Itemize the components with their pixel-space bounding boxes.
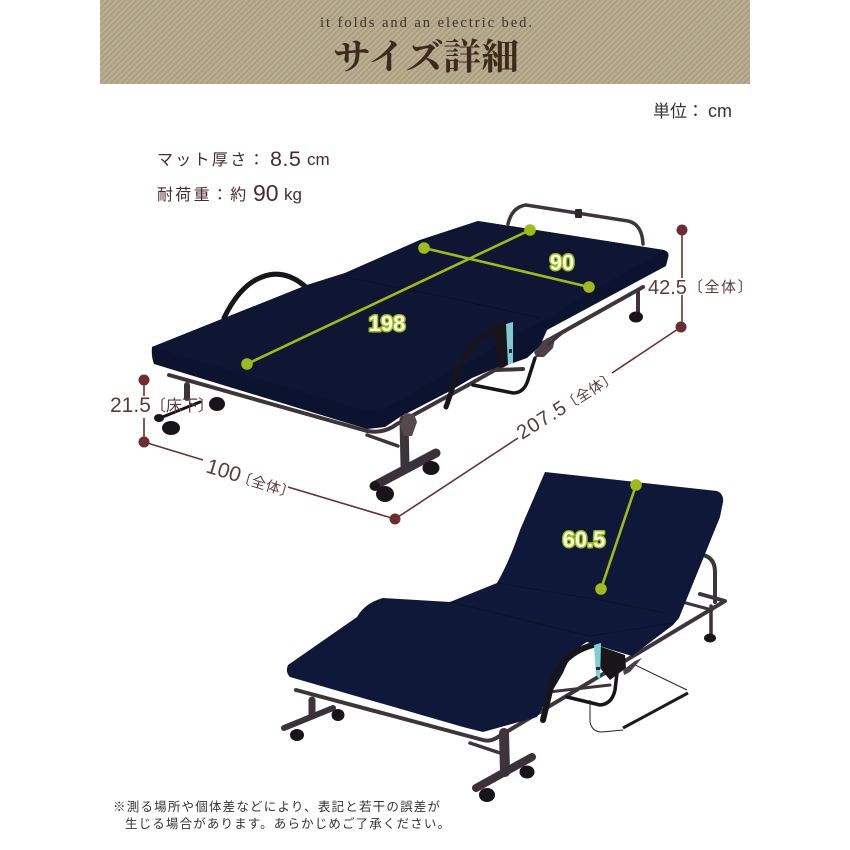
dimension: floor clearance 21.5 (110, 374, 214, 448)
mattress thickness: マット厚さ： (157, 151, 267, 169)
dimension: height 42.5: 〔全体〕 (688, 279, 754, 296)
reclined bed photo (284, 472, 725, 802)
cord (590, 665, 687, 732)
head handle (703, 555, 715, 602)
arch handle (543, 645, 593, 720)
dimension: back height 60.5 (563, 479, 642, 595)
fold bracket (473, 358, 535, 393)
dimension: length 198 (241, 224, 536, 370)
dimension: width 100 (144, 442, 400, 524)
dimension: length 198: 198 (369, 311, 405, 336)
mattress thickness (157, 147, 330, 171)
side rails (169, 287, 643, 432)
rear leg (709, 606, 713, 636)
footnote: 生じる場合があります。あらかじめご了承ください。 (125, 816, 450, 831)
load capacity: kg (284, 185, 302, 204)
dimension: floor clearance 21.5: 21.5 (110, 394, 151, 417)
dimension: length 207.5 (395, 322, 686, 519)
title: サイズ詳細 (333, 37, 519, 77)
dimension: width 90 (418, 242, 595, 293)
mattress (287, 472, 723, 732)
unit note: cm (708, 101, 732, 121)
unit note: 単位： (653, 102, 704, 121)
dimension: length 207.5: 207.5 (513, 396, 571, 444)
specifications (157, 147, 330, 206)
mattress thickness: 8.5 (270, 147, 301, 171)
header subtitle: it folds and an electric bed. (320, 15, 532, 31)
dimension: length 207.5: 〔全体〕 (560, 368, 620, 414)
right arch handle (446, 328, 497, 407)
load capacity: 90 (253, 180, 279, 206)
dimension: width 90: 90 (550, 250, 574, 275)
header banner (100, 0, 750, 84)
frame legs back (636, 290, 640, 312)
load capacity (157, 180, 302, 206)
front leg and foot (404, 420, 405, 466)
flat bed photo (152, 205, 668, 502)
dimension: floor clearance 21.5: 〔床下〕 (150, 397, 214, 415)
front leg and foot (504, 733, 505, 772)
footnote (113, 799, 450, 831)
left leg and foot (308, 700, 316, 716)
dimension: back height 60.5: 60.5 (563, 527, 605, 552)
mechanism (534, 338, 555, 357)
bracket (567, 673, 617, 705)
dimension: width 100: 〔全体〕 (235, 469, 297, 502)
mattress thickness: cm (307, 150, 330, 169)
mattress (152, 221, 668, 429)
remote controller (506, 322, 513, 365)
dimension: height 42.5: 42.5 (648, 277, 687, 299)
remote controller (594, 643, 601, 680)
dimension: height 42.5 (648, 224, 754, 327)
dimension: width 100: 100 (204, 455, 244, 487)
left arch handle (224, 274, 307, 318)
frame rails (296, 594, 725, 741)
head rail (508, 205, 643, 244)
footnote: ※測る場所や個体差などにより、表記と若干の誤差が (113, 799, 440, 814)
unit note (653, 101, 732, 121)
load capacity: 耐荷重：約 (157, 186, 249, 204)
